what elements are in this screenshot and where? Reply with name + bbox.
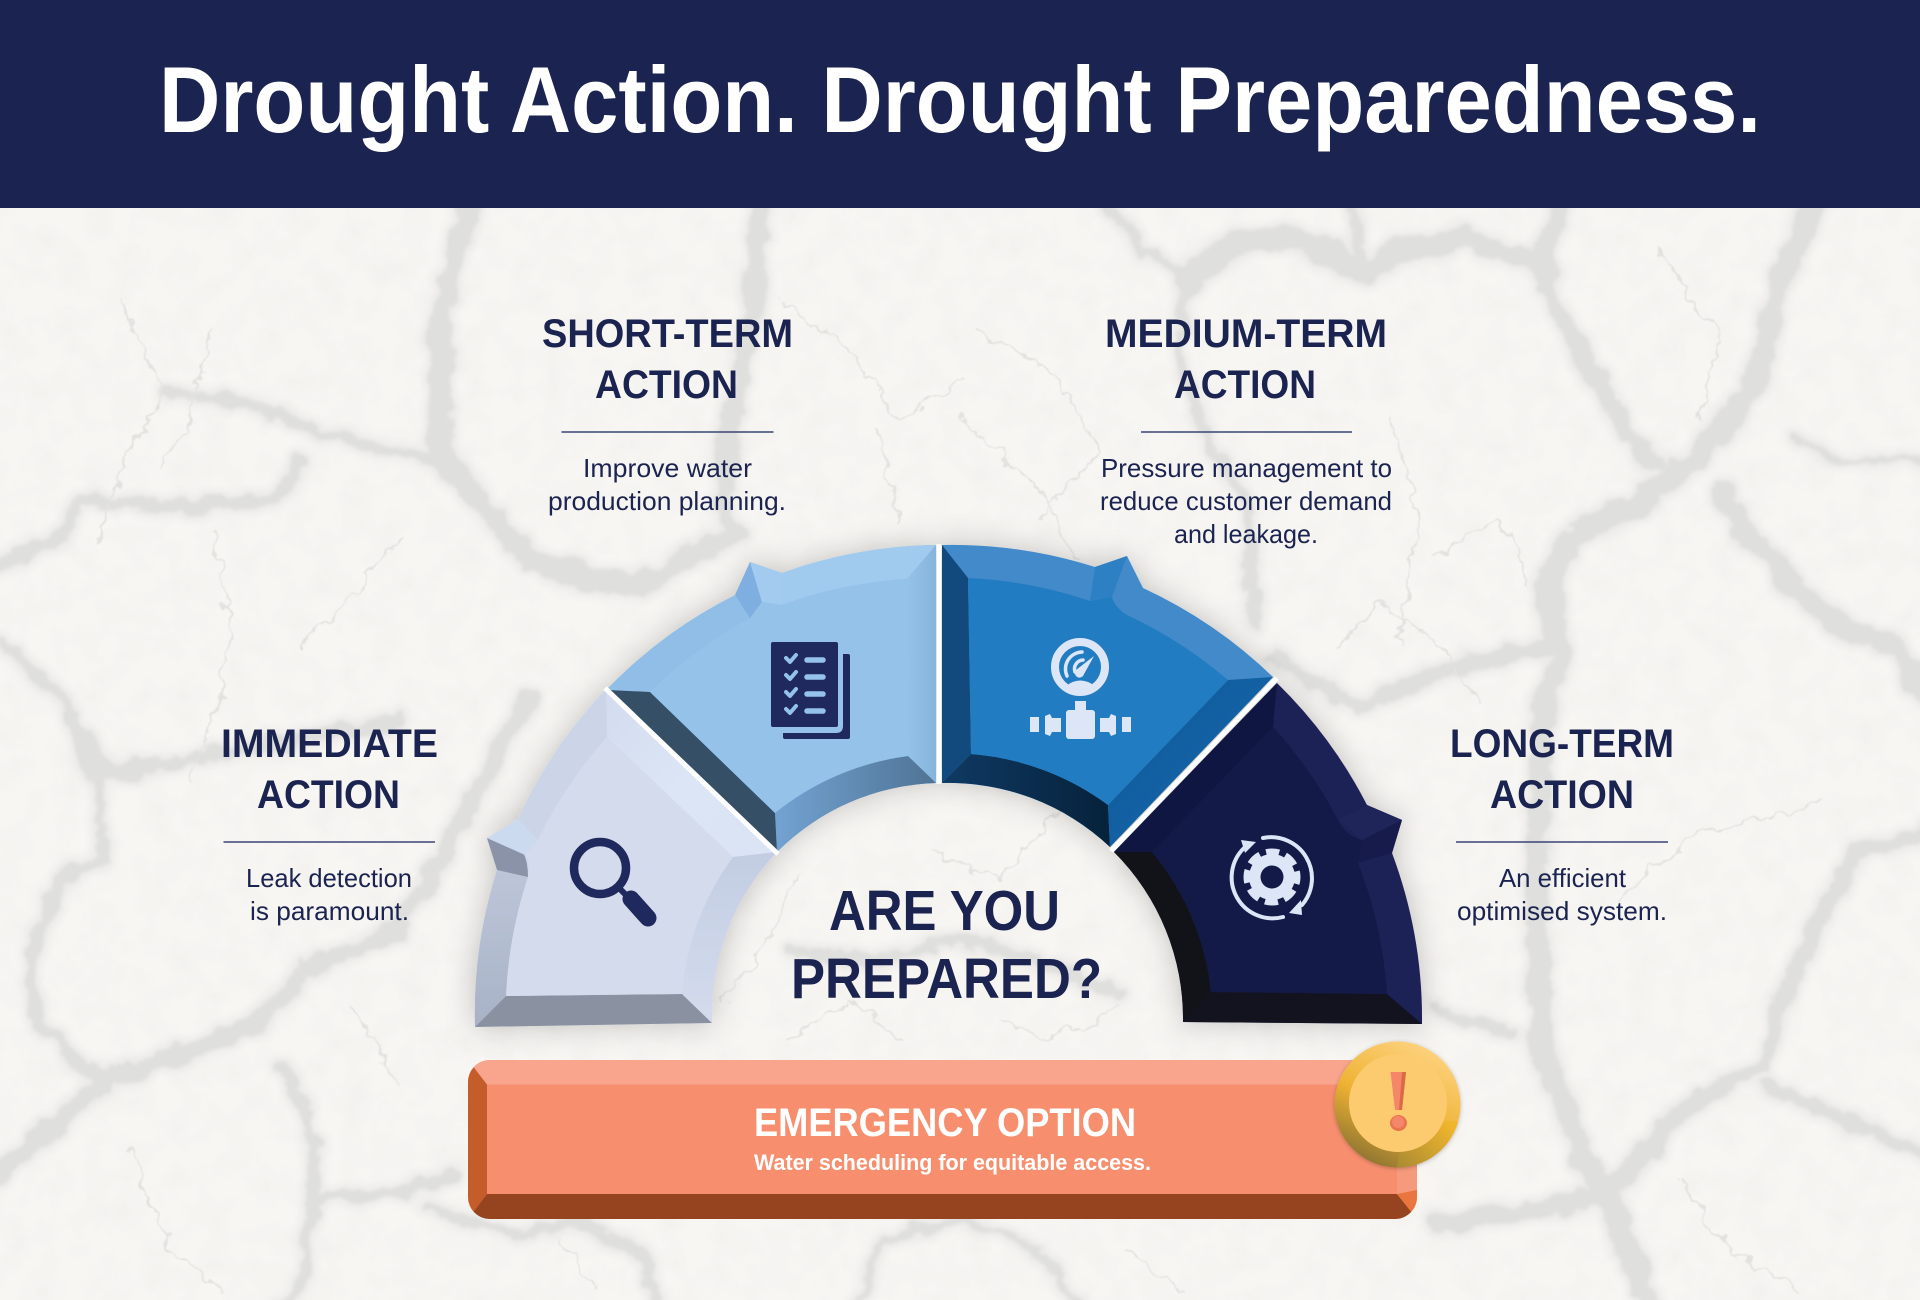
heading: short-term action: SHORT-TERM	[542, 312, 793, 356]
heading: short-term action: ACTION	[595, 363, 738, 407]
icon: gear with cycle arrows	[1232, 837, 1312, 918]
icon: checklist document	[771, 642, 850, 739]
header band	[0, 0, 1920, 208]
heading: long-term action: ACTION	[1490, 773, 1634, 817]
icon: pressure gauge on valve	[1030, 642, 1131, 739]
description: short-term action	[548, 453, 786, 516]
segment: long-term (navy)	[1114, 683, 1422, 1024]
icon: magnifying glass	[574, 842, 648, 918]
description: long-term action: An efficient	[1499, 863, 1627, 893]
segment: short-term (light blue)	[608, 545, 936, 852]
heading: short-term action	[542, 312, 793, 407]
description: immediate action: Leak detection	[246, 863, 412, 893]
description: immediate action: is paramount.	[250, 896, 409, 926]
panel: medium-term action text	[1100, 312, 1392, 549]
heading: medium-term action: MEDIUM-TERM	[1105, 312, 1387, 356]
emergency description: Water scheduling for equitable access.	[754, 1150, 1151, 1175]
heading: long-term action	[1450, 722, 1674, 817]
description: short-term action: Improve water	[583, 453, 752, 483]
heading: immediate action: ACTION	[257, 773, 400, 817]
exclamation mark	[1390, 1072, 1407, 1131]
semicircle gauge	[475, 544, 1422, 1027]
emergency heading: EMERGENCY OPTION	[754, 1101, 1136, 1145]
description: long-term action	[1457, 863, 1667, 926]
heading: immediate action: IMMEDIATE	[221, 722, 438, 766]
heading: long-term action: LONG-TERM	[1450, 722, 1674, 766]
description: medium-term action: reduce customer demand	[1100, 486, 1392, 516]
centre heading: are you prepared?: ARE YOU	[829, 879, 1060, 943]
centre heading: are you prepared?	[791, 879, 1102, 1011]
heading: immediate action	[221, 722, 438, 817]
panel: long-term action text	[1450, 722, 1674, 926]
description: short-term action: production planning.	[548, 486, 786, 516]
title: Drought Action. Drought Preparedness.	[159, 47, 1761, 152]
description: immediate action	[246, 863, 412, 926]
description: medium-term action: Pressure management to	[1101, 453, 1392, 483]
icon: warning coin	[1334, 1042, 1460, 1168]
panel: immediate action text	[221, 722, 438, 926]
description: medium-term action	[1100, 453, 1392, 549]
segment: immediate (light grey-blue)	[475, 689, 777, 1027]
heading: medium-term action	[1105, 312, 1387, 407]
heading: medium-term action: ACTION	[1174, 363, 1316, 407]
emergency option bar	[468, 1060, 1417, 1219]
description: medium-term action: and leakage.	[1174, 519, 1318, 549]
panel: short-term action text	[542, 312, 793, 516]
description: long-term action: optimised system.	[1457, 896, 1667, 926]
centre heading: are you prepared?: PREPARED?	[791, 947, 1102, 1011]
segment: medium-term (mid blue)	[942, 545, 1273, 847]
